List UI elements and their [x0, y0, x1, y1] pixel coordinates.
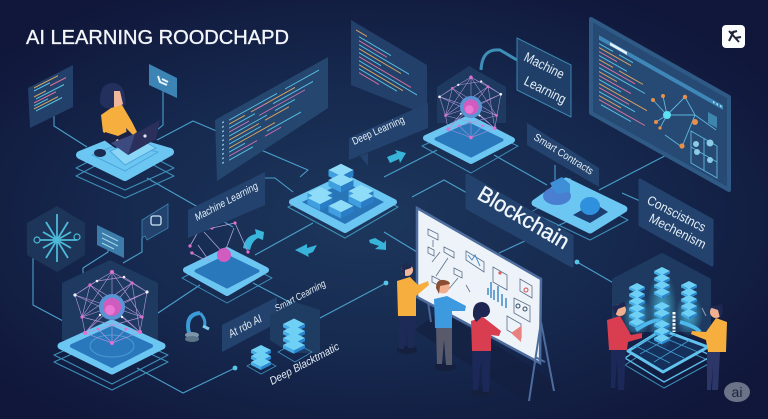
label: deep blacktmatic: Deep Blacktmatic: [268, 341, 342, 388]
panel: consensus label: Mechenism: [647, 210, 709, 252]
arrow: left: [295, 244, 317, 257]
panel: consensus label: [640, 180, 712, 265]
panel: deep learning label: Deep Learning: [350, 114, 406, 148]
network graph on screen: [653, 96, 717, 178]
panel: at rdo ai label: [222, 297, 277, 352]
panel: blockchain label: Blockchain: [473, 181, 574, 254]
platform: smart contracts: [531, 177, 628, 240]
person: orange shirt at board: [397, 263, 429, 354]
badge: ai: [724, 382, 750, 402]
panel: machine learning label top: [517, 38, 571, 117]
icon: magnifier: [185, 313, 209, 342]
panel: small note: [97, 225, 124, 258]
platform: cubes centre: [288, 164, 398, 238]
panel: code top centre: [351, 20, 427, 115]
whiteboard: [415, 208, 560, 410]
panel: big dashboard screen: [591, 19, 729, 190]
platform: neural net top: [422, 66, 518, 173]
platform: data towers: [614, 255, 712, 388]
icon: speech bubble top: [149, 64, 177, 98]
panel: machine learning label top: Machine: [522, 49, 567, 82]
panel: machine learning label lower: Machine Learning: [193, 180, 260, 224]
arrow: down right: [369, 238, 386, 250]
badge: ai: ai: [732, 384, 742, 400]
connector lines: [33, 50, 682, 393]
connector dots: [233, 145, 684, 370]
panel: smart contracts label: Smart Contracts: [531, 131, 595, 178]
panel: code large centre: [215, 57, 328, 181]
platform: neural net middle: [182, 221, 272, 303]
arrow: up right: [387, 150, 406, 163]
person: red shirt at board: [471, 302, 501, 397]
arrow: curved: [243, 229, 264, 250]
icon: tree hexagon: [27, 206, 85, 272]
panel: server stacks: [247, 302, 320, 374]
title: AI LEARNING ROODCHAPD: [26, 27, 289, 49]
panel: machine learning label top: Learning: [522, 73, 569, 107]
icon: top right badge: [722, 25, 745, 48]
person: blue shirt at board: [434, 280, 466, 371]
person: woman with laptop: [100, 83, 160, 155]
panel: small code left: [28, 65, 73, 128]
platform: person at laptop: [76, 138, 174, 198]
panel: at rdo ai label: At rdo AI: [226, 313, 265, 341]
panel: deep learning label: [349, 103, 428, 166]
panel: consensus label: Conscistncs: [645, 192, 709, 235]
icon: bubble lower: [142, 204, 168, 240]
platform: big neural net: [54, 260, 168, 390]
panel: machine learning label lower: [188, 172, 265, 238]
person: red shirt right: [607, 302, 642, 390]
label: smart cearning: Smart Cearning: [273, 278, 328, 315]
person: orange shirt right: [691, 304, 727, 390]
